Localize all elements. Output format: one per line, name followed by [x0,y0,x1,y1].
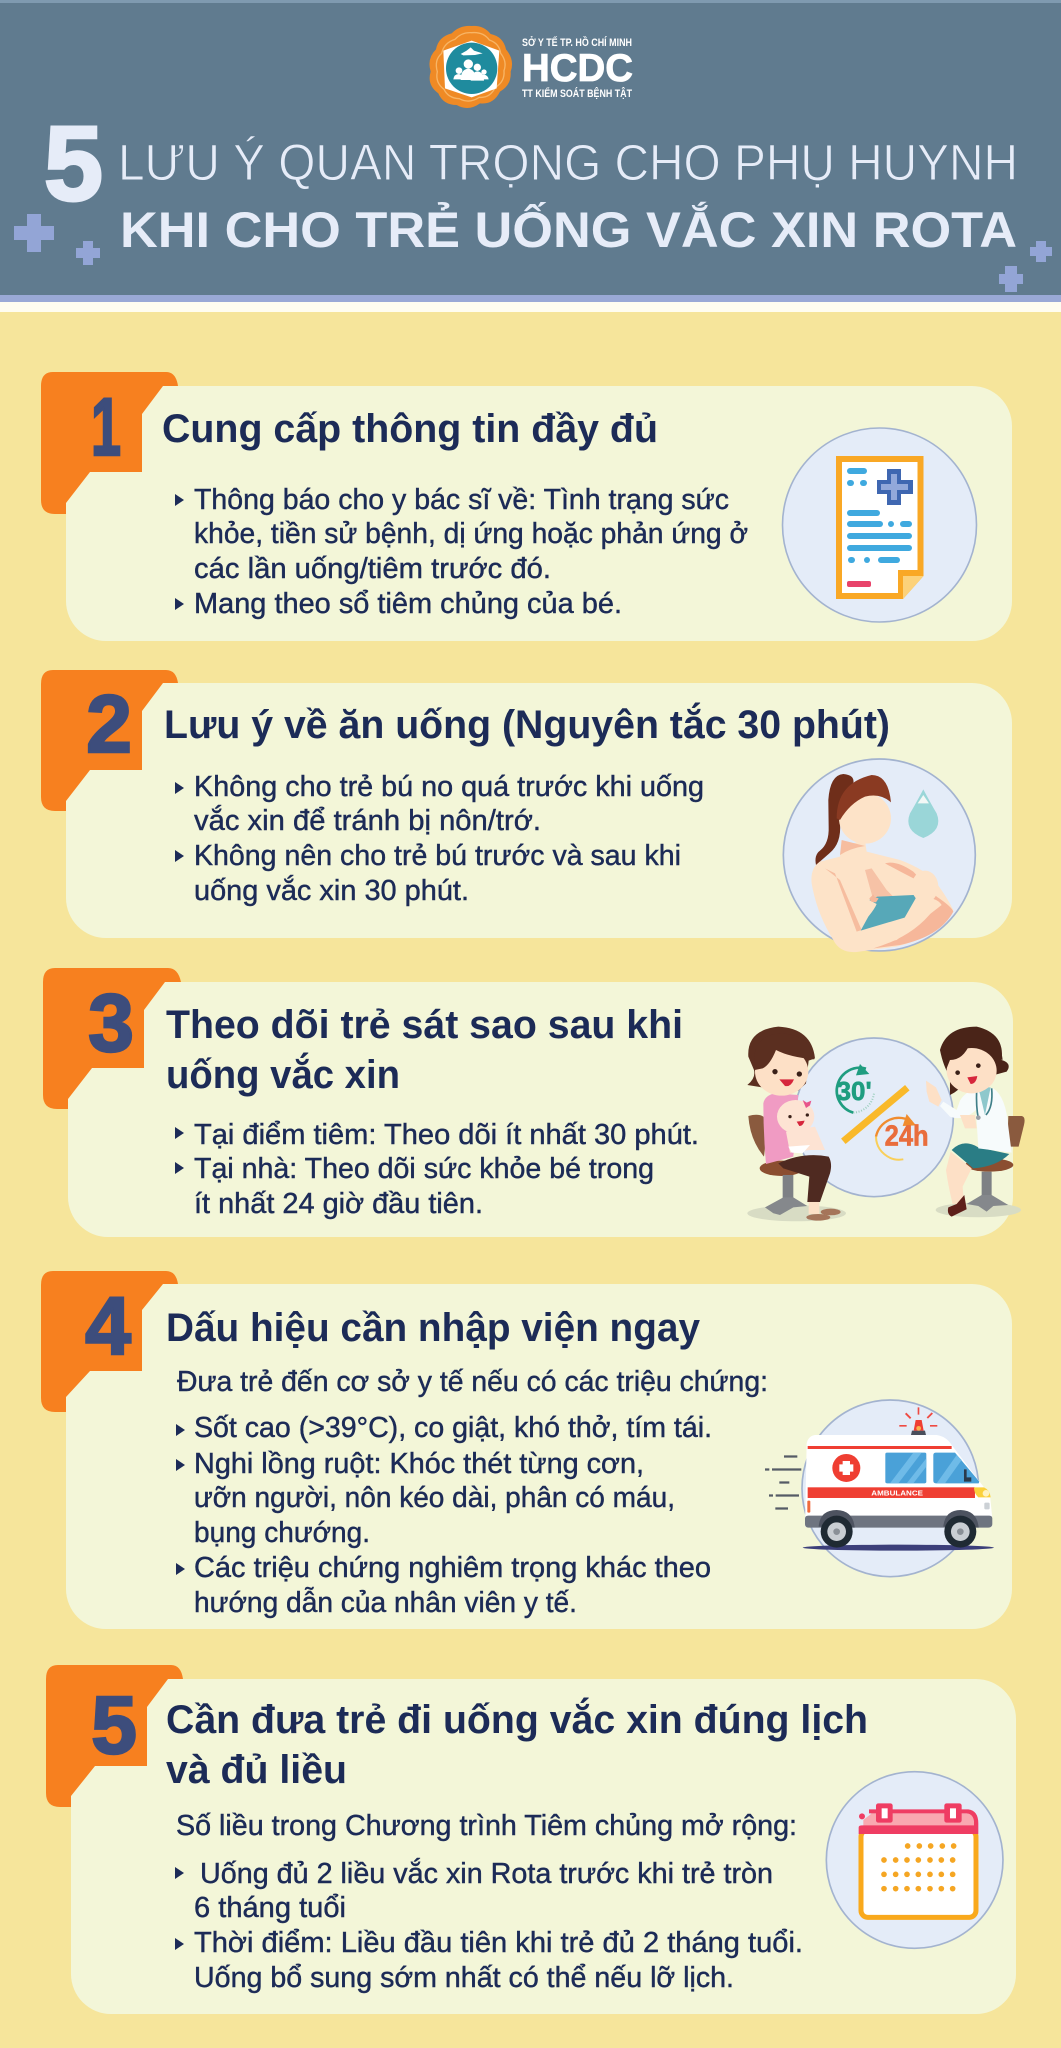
24 hours timer: 24h [885,1121,929,1153]
step 5 intro text: Số liều trong Chương trình Tiêm chủng mở rộng: [176,1810,797,1842]
step 3 number: 3 [88,978,134,1069]
step 3 bullet text: ít nhất 24 giờ đầu tiên. [194,1188,483,1220]
logo text [522,36,633,100]
step 3 bullet text [175,1119,699,1220]
panel: step 1 [41,372,1012,641]
ambulance label: AMBULANCE [871,1488,923,1497]
30 minutes timer: 30' [837,1076,872,1106]
step 2 number: 2 [86,679,132,770]
24 hours timer [876,1114,929,1160]
icon: breastfeeding mother [783,759,975,952]
step 5 heading [166,1696,868,1792]
step 4 bullet text: Các triệu chứng nghiêm trọng khác theo [194,1552,711,1584]
step 2 bullet text: Không nên cho trẻ bú trước và sau khi [194,840,681,872]
step 1 bullet text: các lần uống/tiêm trước đó. [194,553,551,585]
logo text: HCDC [522,47,633,90]
step 5 heading: và đủ liều [166,1748,347,1792]
step 4 bullet text: ưỡn người, nôn kéo dài, phân có máu, [194,1482,675,1514]
step 4 bullet text [176,1412,712,1619]
step 5 card background [71,1679,1016,2014]
header banner [0,0,1061,312]
step 4 card background [66,1284,1012,1629]
step 3 heading: uống vắc xin [166,1051,400,1097]
step 5 orange tag [46,1665,183,1807]
decorative plus icons [14,214,1052,292]
step 2 heading: Lưu ý về ăn uống (Nguyên tắc 30 phút) [164,701,890,747]
icon: medical document [782,428,976,622]
step 4 number: 4 [85,1281,131,1372]
step 5 bullet text: 6 tháng tuổi [194,1892,346,1924]
panel: step 5 [46,1665,1016,2014]
step 5 bullet text: Thời điểm: Liều đầu tiên khi trẻ đủ 2 tháng tuổi. [194,1927,803,1959]
step 1 bullet text: Thông báo cho y bác sĩ về: Tình trạng sức [194,484,729,516]
step 1 bullet text: Mang theo sổ tiêm chủng của bé. [194,588,622,620]
step 2 orange tag [41,670,178,811]
icon: HCDC logo emblem [429,26,512,108]
step 5 bullet text: Uống bổ sung sớm nhất có thể nếu lỡ lịch. [194,1962,734,1994]
step 1 bullet text [175,484,748,620]
step 4 bullet text: Nghi lồng ruột: Khóc thét từng cơn, [194,1448,644,1480]
logo text: TT KIỂM SOÁT BỆNH TẬT [522,87,632,100]
30 minutes timer [837,1064,874,1113]
logo text: SỞ Y TẾ TP. HỒ CHÍ MINH [522,36,632,49]
step 4 heading: Dấu hiệu cần nhập viện ngay [166,1306,701,1350]
step 1 orange tag [41,372,178,514]
step 5 heading: Cần đưa trẻ đi uống vắc xin đúng lịch [166,1696,868,1742]
step 2 bullet text: Không cho trẻ bú no quá trước khi uống [194,771,704,803]
step 4 bullet text: bụng chướng. [194,1517,370,1549]
title: 5 [44,105,103,223]
icon: ambulance [765,1400,994,1577]
step 3 card background [68,982,1013,1237]
step 2 bullet text [175,771,704,907]
step 1 bullet text: khỏe, tiền sử bệnh, dị ứng hoặc phản ứng ở [194,518,748,550]
step 5 number: 5 [91,1680,137,1771]
title: LƯU Ý QUAN TRỌNG CHO PHỤ HUYNH [118,134,1018,191]
panel: step 3 [43,968,1025,1237]
step 4 bullet text: hướng dẫn của nhân viên y tế. [194,1586,577,1619]
title: KHI CHO TRẺ UỐNG VẮC XIN ROTA [120,201,1017,258]
step 1 heading: Cung cấp thông tin đầy đủ [162,407,658,451]
step 5 bullet text [175,1857,803,1994]
step 2 card background [66,683,1012,938]
step 4 bullet text: Sốt cao (>39°C), co giật, khó thở, tím tái. [194,1412,712,1444]
illustration: mother, baby, doctor and time circle [747,1027,1025,1221]
step 1 number: 1 [91,382,121,473]
step 3 bullet text: Tại nhà: Theo dõi sức khỏe bé trong [194,1153,654,1185]
panel: step 4 [41,1271,1012,1629]
step 3 orange tag [43,968,181,1109]
step 3 bullet text: Tại điểm tiêm: Theo dõi ít nhất 30 phút. [194,1119,699,1151]
mother and baby [747,1027,846,1221]
step 1 card background [66,386,1012,641]
step 4 intro text: Đưa trẻ đến cơ sở y tế nếu có các triệu chứng: [177,1366,768,1398]
title [44,105,1018,258]
icon: calendar [826,1772,1003,1948]
step 5 bullet text: Uống đủ 2 liều vắc xin Rota trước khi trẻ tròn [200,1857,773,1890]
doctor [926,1027,1025,1217]
step 2 bullet text: uống vắc xin 30 phút. [194,874,469,907]
panel: step 2 [41,670,1012,952]
step 3 heading [166,1003,683,1097]
step 2 bullet text: vắc xin để tránh bị nôn/trớ. [194,804,541,837]
step 3 heading: Theo dõi trẻ sát sao sau khi [166,1003,683,1047]
step 4 orange tag [41,1271,178,1412]
